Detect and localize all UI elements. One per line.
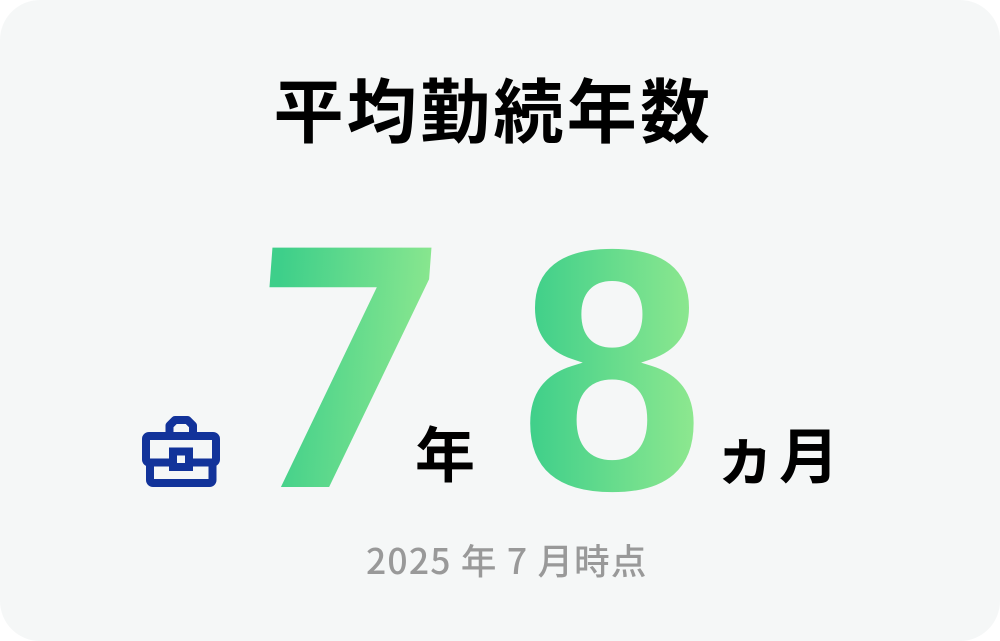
icon: briefcase [146, 420, 216, 483]
number: 8 months: 8 [509, 184, 715, 570]
title: 平均勤続年数 [274, 57, 713, 158]
number: 7 years: 7 [225, 177, 464, 571]
unit: months: ヵ [714, 407, 777, 498]
unit: months [714, 407, 839, 498]
unit: months: 月 [779, 409, 839, 496]
footnote: as of date: 2025 年 7 月時点 [366, 534, 648, 585]
unit: years: 年 [415, 408, 475, 495]
